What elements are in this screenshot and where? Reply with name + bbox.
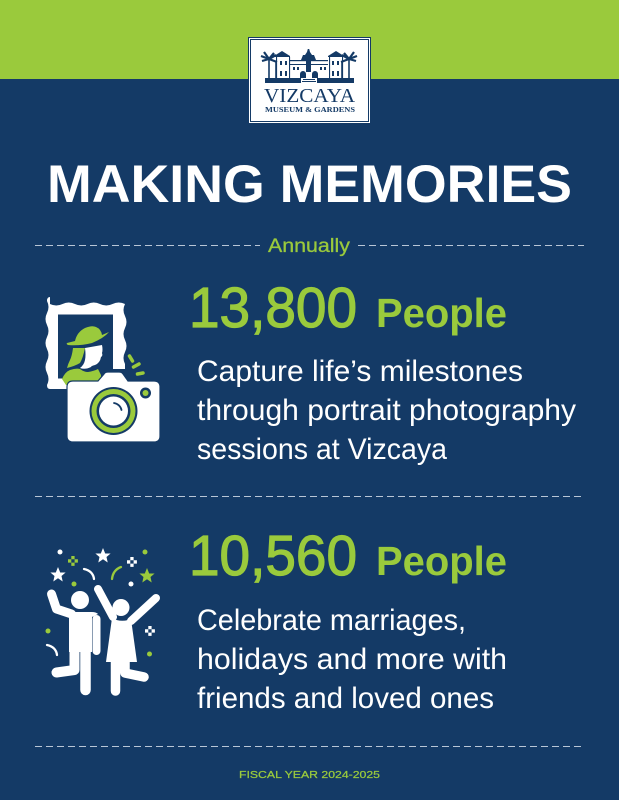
icon: scalloped frame — [46, 297, 126, 389]
description: portrait photography — [197, 355, 576, 466]
icon: flash lines — [130, 356, 143, 374]
icon: man — [52, 591, 98, 690]
title: MAKING MEMORIES — [47, 155, 572, 214]
logo: subtitle: MUSEUM & GARDENS — [265, 105, 355, 114]
stat: 10,560 people: 10,560 — [189, 524, 357, 588]
logo: right palms — [341, 52, 357, 80]
description: celebrations — [197, 604, 507, 715]
logo: wordmark: VIZCAYA — [264, 85, 356, 107]
stat: 13,800 people: People — [376, 290, 507, 336]
description: celebrations: friends and loved ones — [197, 682, 494, 715]
icon: confetti white — [50, 548, 155, 636]
icon: confetti green — [46, 550, 155, 656]
stat: 13,800 people: 13,800 — [189, 276, 357, 340]
description: celebrations: holidays and more with — [197, 643, 507, 676]
icon: woman with hat — [62, 326, 109, 385]
icon: woman — [98, 589, 156, 691]
footer: fiscal year: FISCAL YEAR 2024-2025 — [239, 769, 380, 781]
icon: camera lens — [90, 387, 138, 435]
logo: left palms — [261, 52, 277, 80]
icon: hair — [67, 348, 85, 368]
description: portrait photography: sessions at Vizcaya — [197, 433, 447, 466]
icon: hat — [67, 326, 109, 345]
icon: portrait and camera — [46, 297, 160, 442]
stat: 10,560 people — [189, 524, 507, 588]
green top band — [0, 0, 619, 79]
icon: shoulders — [62, 369, 101, 385]
icon: celebrating people — [46, 548, 156, 691]
stat: 13,800 people — [189, 276, 507, 340]
annually label: Annually — [268, 236, 351, 257]
icon: camera body — [67, 372, 160, 442]
logo — [248, 38, 370, 124]
logo: building — [265, 49, 354, 83]
description: portrait photography: Capture life’s milestones — [197, 355, 523, 388]
description: celebrations: Celebrate marriages, — [197, 604, 466, 637]
logo: palms and building — [261, 49, 357, 83]
description: portrait photography: through portrait photography — [197, 394, 576, 427]
icon: face — [80, 345, 102, 369]
stat: 10,560 people: People — [376, 538, 507, 584]
icon: camera button — [140, 388, 151, 398]
